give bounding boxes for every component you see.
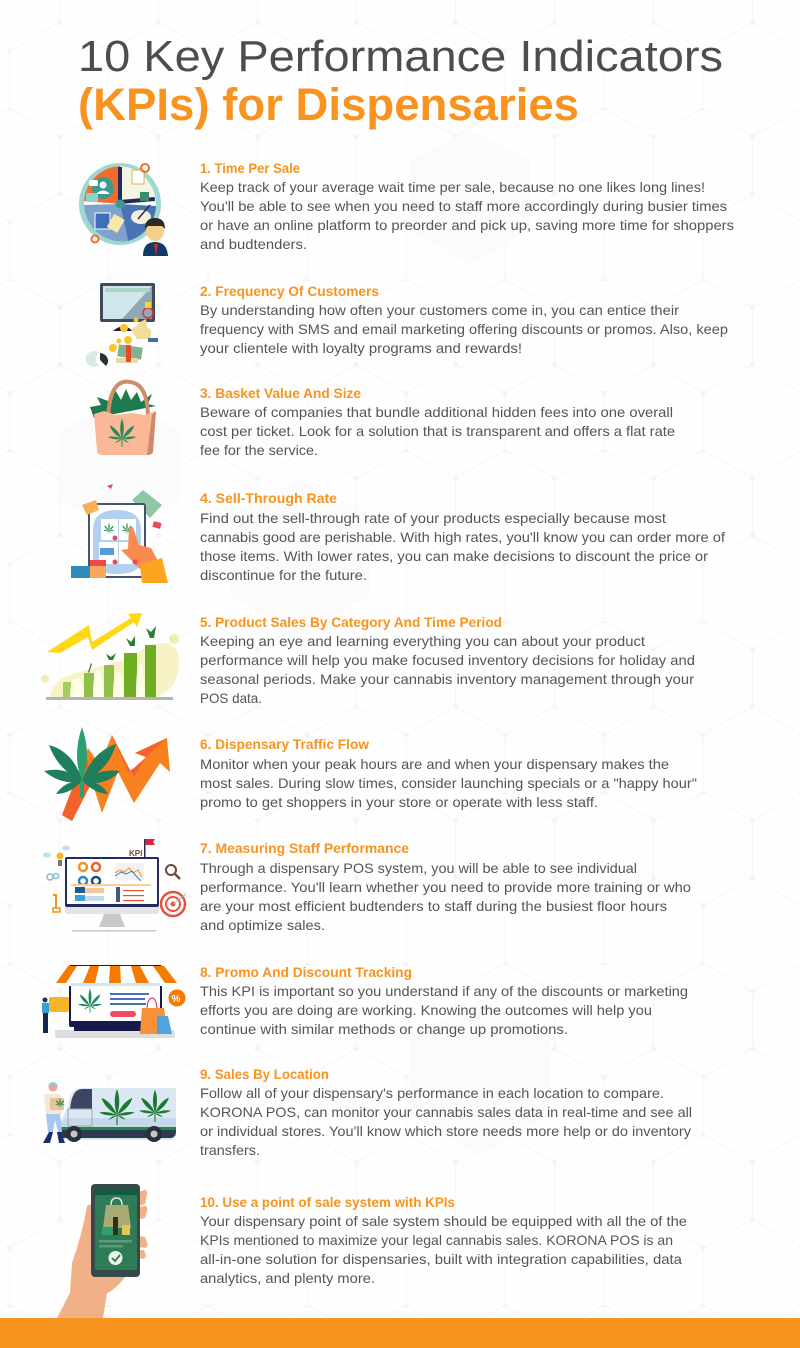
text block: 7. Measuring Staff Performance: are your most efficient budtenders to staff during the busiest floor hours <box>200 898 667 914</box>
icon: shopping bag with leaves <box>90 382 156 455</box>
title: 10 Key Performance Indicators <box>78 32 723 81</box>
text block: 2. Frequency Of Customers <box>200 283 728 356</box>
text block: 5. Product Sales By Category And Time Period: seasonal periods. Make your cannabis inventory management through your <box>200 671 694 687</box>
icon: hand holding phone <box>57 1184 148 1318</box>
text block: 2. Frequency Of Customers: 2. Frequency Of Customers <box>200 283 379 299</box>
text block: 9. Sales By Location <box>200 1066 692 1158</box>
text block: 9. Sales By Location: 9. Sales By Location <box>200 1066 329 1082</box>
text block: 1. Time Per Sale: 1. Time Per Sale <box>200 160 300 176</box>
text block: 7. Measuring Staff Performance: and optimize sales. <box>200 917 325 933</box>
text block: 10. Use a point of sale system with KPIs: Your dispensary point of sale system should be equipped with all the of the <box>200 1213 687 1229</box>
icon: KPI dashboard monitor <box>43 839 186 932</box>
text block: 4. Sell-Through Rate: discontinue for the future. <box>200 567 367 583</box>
icon: growth chart with plants <box>41 613 179 700</box>
text block: 2. Frequency Of Customers: By understanding how often your customers come in, you can entice their <box>200 302 679 318</box>
text block: 6. Dispensary Traffic Flow: promo to get shoppers in your store or operate with less staff. <box>200 794 598 810</box>
text block: 1. Time Per Sale: or have an online platform to preorder and pick up, saving more time for shoppers <box>200 217 734 233</box>
icon: monitor with coins <box>86 283 158 367</box>
text block: 6. Dispensary Traffic Flow: most sales. During slow times, consider launching specials or a "happy hour" <box>200 775 697 791</box>
text block: 1. Time Per Sale: You'll be able to see when you need to staff more accordingly during busier times <box>200 198 727 214</box>
text block: 10. Use a point of sale system with KPIs: KPIs mentioned to maximize your legal cannabis sales. KORONA POS is an <box>200 1232 673 1248</box>
icon: laptop storefront: % <box>172 994 180 1005</box>
text block: 3. Basket Value And Size <box>200 385 675 458</box>
icon: leaf and rising arrow <box>44 727 170 821</box>
text block: 4. Sell-Through Rate: Find out the sell-through rate of your products especially because most <box>200 510 666 526</box>
text block: 1. Time Per Sale: and budtenders. <box>200 236 307 252</box>
icon: laptop storefront <box>42 965 186 1038</box>
text block: 8. Promo And Discount Tracking: This KPI is important so you understand if any of the discounts or marketing <box>200 983 688 999</box>
text block: 10. Use a point of sale system with KPIs: analytics, and plenty more. <box>200 1270 375 1286</box>
text block: 1. Time Per Sale <box>200 160 734 252</box>
text block: 5. Product Sales By Category And Time Period: Keeping an eye and learning everything you can about your product <box>200 633 645 649</box>
footer band <box>0 1318 800 1348</box>
text block: 8. Promo And Discount Tracking <box>200 964 688 1037</box>
text block: 8. Promo And Discount Tracking: 8. Promo And Discount Tracking <box>200 964 412 980</box>
text block: 3. Basket Value And Size: 3. Basket Value And Size <box>200 385 361 401</box>
text block: 4. Sell-Through Rate <box>200 490 725 583</box>
text block: 8. Promo And Discount Tracking: efforts you are doing are working. Knowing the outcomes will help you <box>200 1002 652 1018</box>
icon: KPI dashboard monitor: KPI <box>129 849 142 858</box>
text block: 4. Sell-Through Rate: those items. With lower rates, you can make decisions to discount the price or <box>200 548 708 564</box>
title: (KPIs) for Dispensaries <box>78 79 579 130</box>
icon: clock wheel time per sale <box>79 163 168 256</box>
text block: 5. Product Sales By Category And Time Period: performance will help you make focused inventory decisions for holiday and <box>200 652 695 668</box>
text block: 8. Promo And Discount Tracking: continue with similar methods or change up promotions. <box>200 1021 568 1037</box>
text block: 7. Measuring Staff Performance <box>200 840 691 933</box>
text block: 5. Product Sales By Category And Time Period: 5. Product Sales By Category And Time Period <box>200 614 502 630</box>
text block: 3. Basket Value And Size: fee for the service. <box>200 442 318 458</box>
text block: 6. Dispensary Traffic Flow: 6. Dispensary Traffic Flow <box>200 736 369 752</box>
text block: 10. Use a point of sale system with KPIs: 10. Use a point of sale system with KPIs <box>200 1194 455 1210</box>
icon: delivery van and courier <box>43 1082 176 1143</box>
text block: 4. Sell-Through Rate: cannabis good are perishable. With high rates, you'll know you can order more of <box>200 529 725 545</box>
text block: 6. Dispensary Traffic Flow <box>200 736 697 810</box>
text block: 9. Sales By Location: KORONA POS, can monitor your cannabis sales data in real-time and see all <box>200 1104 692 1120</box>
text block: 3. Basket Value And Size: cost per ticket. Look for a solution that is transparent and offers a flat rate <box>200 423 675 439</box>
text block: 10. Use a point of sale system with KPIs <box>200 1194 687 1286</box>
icon: tablet with hand <box>71 484 168 583</box>
text block: 9. Sales By Location: or individual stores. You'll know which store needs more help or do inventory <box>200 1123 691 1139</box>
text block: 1. Time Per Sale: Keep track of your average wait time per sale, because no one likes long lines! <box>200 179 705 195</box>
text block: 2. Frequency Of Customers: frequency with SMS and email marketing offering discounts or promos. Also, keep <box>200 321 728 337</box>
text block: 6. Dispensary Traffic Flow: Monitor when your peak hours are and when your dispensary makes the <box>200 756 669 772</box>
text block: 5. Product Sales By Category And Time Period <box>200 614 695 706</box>
text block: 10. Use a point of sale system with KPIs: all-in-one solution for dispensaries, built with integration capabilities, data <box>200 1251 682 1267</box>
text block: 9. Sales By Location: Follow all of your dispensary's performance in each location to compare. <box>200 1085 664 1101</box>
text block: 2. Frequency Of Customers: your clientele with loyalty programs and rewards! <box>200 340 522 356</box>
text block: 3. Basket Value And Size: Beware of companies that bundle additional hidden fees into one overall <box>200 404 673 420</box>
text block: 7. Measuring Staff Performance: performance. You'll learn whether you need to provide more training or who <box>200 879 691 895</box>
title <box>78 32 723 130</box>
text block: 7. Measuring Staff Performance: Through a dispensary POS system, you will be able to see individual <box>200 860 637 876</box>
text block: 9. Sales By Location: transfers. <box>200 1142 260 1158</box>
text block: 7. Measuring Staff Performance: 7. Measuring Staff Performance <box>200 840 409 856</box>
text block: 5. Product Sales By Category And Time Period: POS data. <box>200 690 262 706</box>
text block: 4. Sell-Through Rate: 4. Sell-Through Rate <box>200 490 337 506</box>
